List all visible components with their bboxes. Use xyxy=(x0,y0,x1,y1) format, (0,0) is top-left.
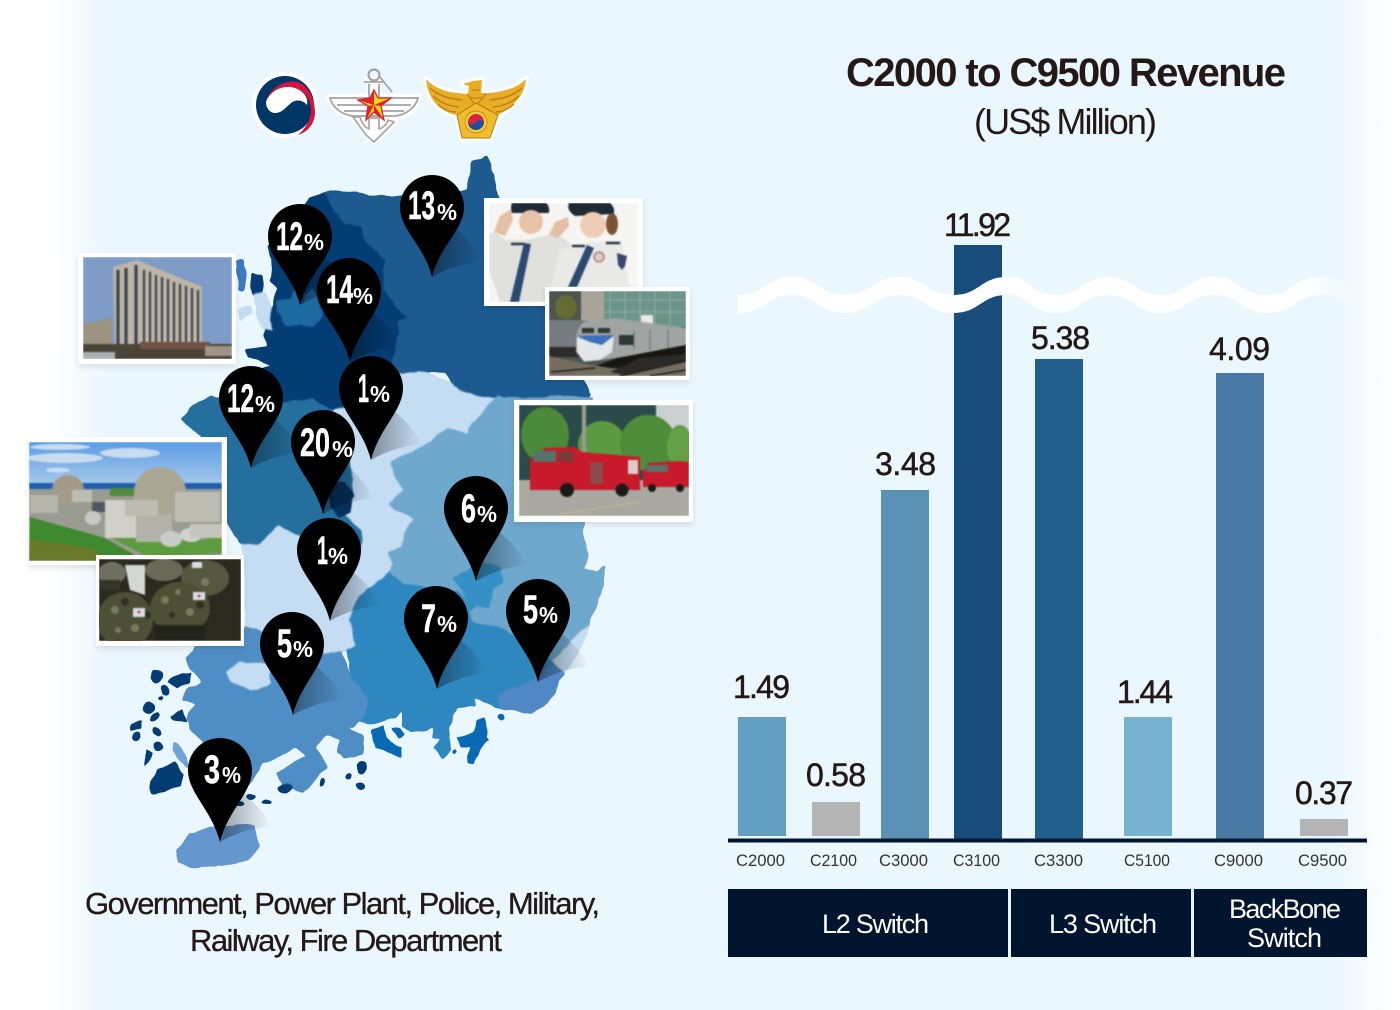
group box: L2 Switch: L2 Switch xyxy=(822,909,929,939)
pin: Jeju 3%: 3 xyxy=(204,748,220,792)
region: Jeonnam xyxy=(183,627,367,797)
map of South Korea xyxy=(129,156,605,867)
bar: C9500 0.37: 0.37 xyxy=(1295,775,1353,811)
bar: C2100 0.58 xyxy=(806,757,866,836)
group box: BackBone Switch: Switch xyxy=(1247,923,1322,953)
region: Gyeongnam xyxy=(348,572,553,757)
region: Seoul xyxy=(277,290,322,327)
photo: soldiers xyxy=(96,555,244,648)
axis break wave xyxy=(738,277,1374,313)
region: Incheon islands xyxy=(237,258,272,330)
bar: C5100 1.44 xyxy=(1117,674,1173,836)
bar: C3100 11.92: 11.92 xyxy=(944,207,1011,243)
pin: Gyeonggi 14% xyxy=(317,258,401,362)
pin: Sejong Chungnam 20%: % xyxy=(332,436,353,462)
chart title: C2000 to C9500 Revenue xyxy=(846,51,1286,95)
icon: police emblem xyxy=(426,79,526,138)
pin: Chungbuk 1%: 1 xyxy=(358,367,369,411)
map caption: Government, Power Plant, Police, Military, xyxy=(85,886,600,921)
bar: C9000 4.09: 4.09 xyxy=(1209,331,1270,367)
pin: Jeonnam north 5%: 5 xyxy=(277,622,292,666)
group box: BackBone Switch xyxy=(1194,889,1367,957)
pin: Busan Ulsan 5%: % xyxy=(539,602,558,628)
group box: L2 Switch xyxy=(728,889,1008,957)
group box: L3 Switch xyxy=(1011,889,1191,957)
x-axis category labels: C2000 xyxy=(736,851,785,870)
pin: Jeonnam north 5% xyxy=(260,612,344,715)
pin: Gyeongbuk 6%: 6 xyxy=(461,487,476,531)
pin: Gyeonggi north 12% xyxy=(268,204,351,305)
chart title xyxy=(846,51,1286,142)
icon: military emblem xyxy=(329,70,419,142)
pin: Gangwon 13%: % xyxy=(437,199,457,225)
region: southeast islands xyxy=(370,714,504,765)
pin: Gangwon 13%: 13 xyxy=(408,184,435,228)
photo: fire engines xyxy=(514,400,693,522)
region: Jeju island xyxy=(178,825,258,867)
pin: Busan Ulsan 5%: 5 xyxy=(523,588,538,632)
region: southwest islands xyxy=(129,670,367,808)
pin: Chungbuk 1% xyxy=(339,356,422,460)
pin: Busan Ulsan 5% xyxy=(506,579,589,682)
pin: Gyeongnam 7% xyxy=(404,586,488,689)
region: Busan xyxy=(500,663,563,713)
map caption xyxy=(85,886,600,958)
photo: nuclear power plant xyxy=(27,437,227,565)
bar chart xyxy=(728,207,1374,870)
bar: C3300 5.38 xyxy=(1031,320,1090,839)
region: Gwangju xyxy=(227,662,270,690)
x-axis category labels: C2100 xyxy=(810,851,857,870)
pin: Gyeongbuk 6%: % xyxy=(477,501,497,527)
photo: KTX train xyxy=(545,287,690,380)
x-axis category labels: C3300 xyxy=(1034,851,1083,870)
photo: government office building xyxy=(78,253,236,364)
pin: Gyeonggi north 12%: 12 xyxy=(276,215,303,259)
pin: Gyeonggi 14%: 14 xyxy=(326,268,353,312)
pin: Jeju 3%: % xyxy=(222,762,241,788)
pin: Jeonbuk 1%: 1 xyxy=(317,529,328,573)
pin: Jeonbuk 1%: % xyxy=(328,543,348,569)
pin: Jeonbuk 1% xyxy=(297,518,381,621)
pin: Chungnam 12%: % xyxy=(255,391,275,417)
region: small peninsula xyxy=(173,742,190,768)
x-axis category labels: C3100 xyxy=(953,851,1000,870)
bar: C2000 1.49: 1.49 xyxy=(733,669,790,705)
bar: C9000 4.09 xyxy=(1209,331,1270,839)
region: Gyeongbuk xyxy=(390,398,605,663)
pin: Gyeongnam 7%: 7 xyxy=(421,597,436,641)
region: Sejong / Daejeon xyxy=(330,482,353,518)
pin: Gangwon 13% xyxy=(400,175,483,277)
pin: Sejong Chungnam 20% xyxy=(291,410,374,514)
photo: police officers saluting xyxy=(484,198,643,306)
group box: L3 Switch: L3 Switch xyxy=(1049,909,1157,939)
pin: Chungnam 12%: 12 xyxy=(227,377,254,421)
bar: C3100 11.92 xyxy=(944,207,1011,839)
region: Chungbuk and Jeonbuk (light) xyxy=(243,362,498,653)
bar: C3000 3.48: 3.48 xyxy=(875,446,936,482)
pin: Jeonnam north 5%: % xyxy=(293,636,313,662)
pin: Gyeonggi north 12%: % xyxy=(304,229,324,255)
map caption: Railway, Fire Department xyxy=(190,923,502,958)
bar: C3000 3.48 xyxy=(875,446,936,839)
x-axis category labels xyxy=(736,851,1347,870)
pin: Chungbuk 1%: % xyxy=(370,381,390,407)
pin: Gyeonggi 14%: % xyxy=(353,283,373,309)
x-axis category labels: C9000 xyxy=(1214,851,1263,870)
x-axis category labels: C9500 xyxy=(1298,851,1347,870)
x-axis category labels: C3000 xyxy=(879,851,928,870)
group box: BackBone Switch: BackBone xyxy=(1229,894,1341,924)
region: Chungnam xyxy=(183,397,360,548)
pin: Gyeongnam 7%: % xyxy=(437,611,457,637)
pin: Jeju 3% xyxy=(188,738,271,842)
bar: C2000 1.49 xyxy=(733,669,790,836)
bar: C9500 0.37 xyxy=(1295,775,1353,836)
pin: Gyeongbuk 6% xyxy=(444,476,527,581)
pin: Chungnam 12% xyxy=(219,366,302,468)
bar: C3300 5.38: 5.38 xyxy=(1031,320,1090,356)
bar: C5100 1.44: 1.44 xyxy=(1117,674,1173,710)
pin: Sejong Chungnam 20%: 20 xyxy=(300,421,330,465)
region: Ulsan xyxy=(553,625,588,675)
icon: government taegeuk logo xyxy=(252,72,318,138)
bar: C2100 0.58: 0.58 xyxy=(806,757,866,793)
x-axis category labels: C5100 xyxy=(1124,851,1170,870)
region: Gyeonggi xyxy=(220,194,405,410)
chart title: (US$ Million) xyxy=(974,101,1157,142)
region: Daegu xyxy=(454,563,502,612)
axis line xyxy=(728,838,1367,842)
logos row xyxy=(252,70,526,142)
region: Gangwon xyxy=(323,156,590,398)
